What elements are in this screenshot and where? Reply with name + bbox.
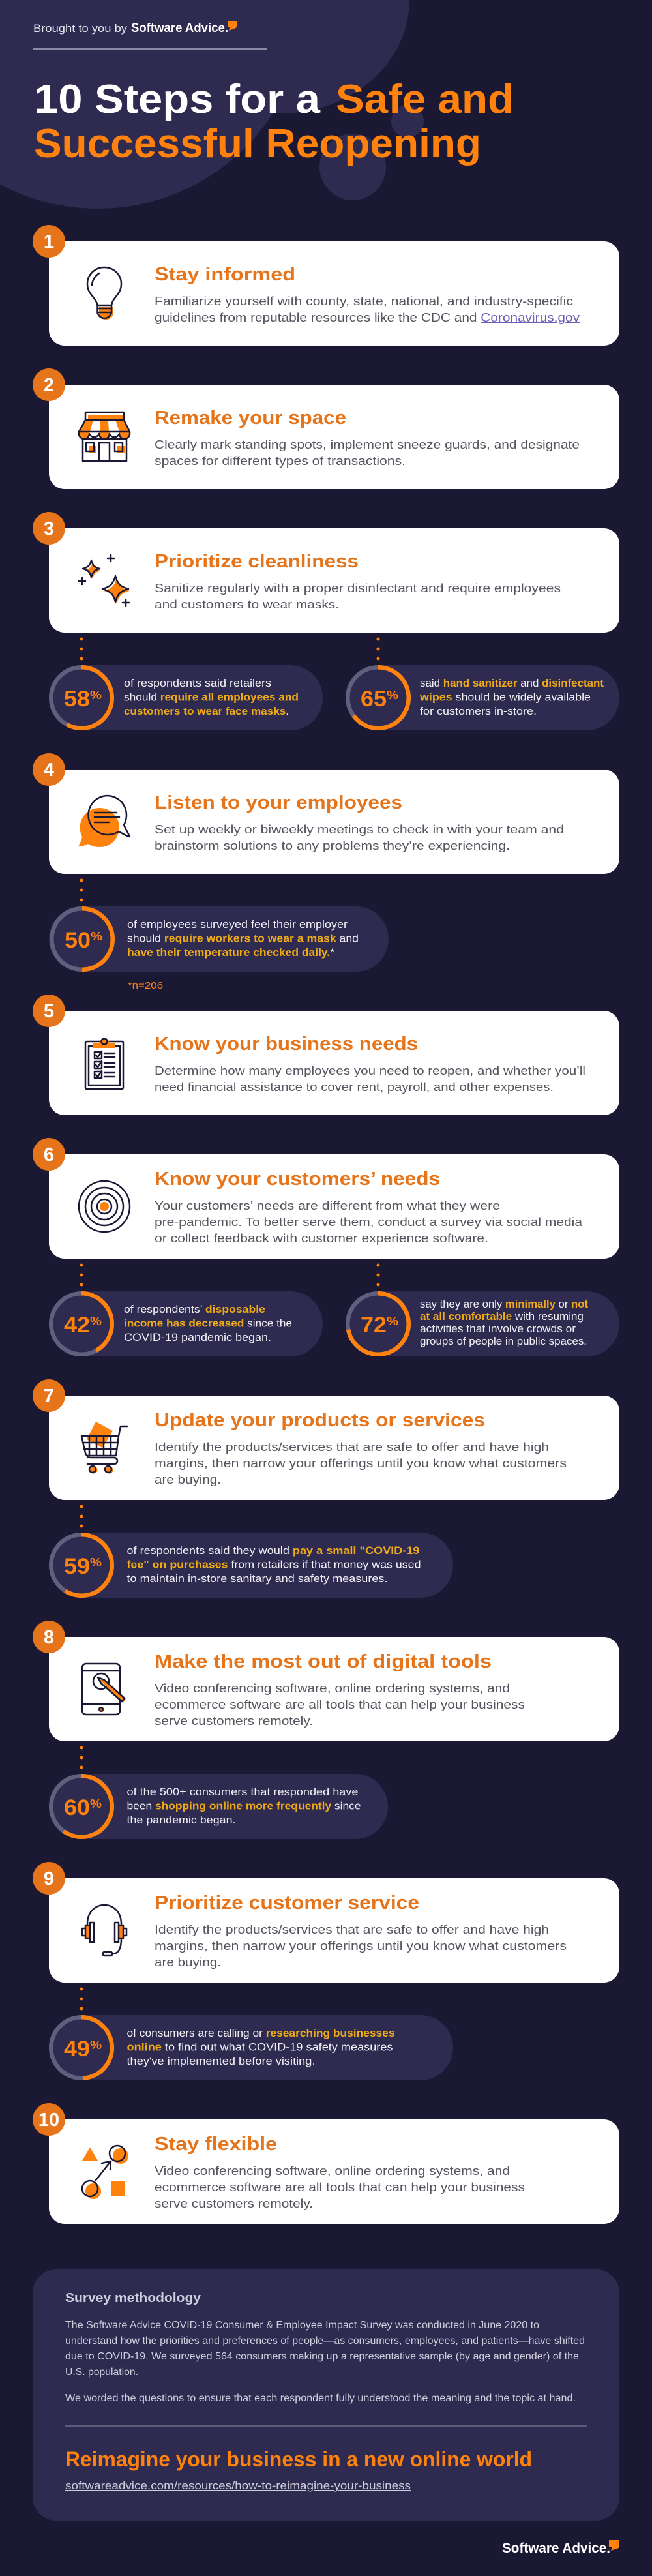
step 9 text bbox=[155, 1923, 567, 1969]
stat text: should require workers to wear a mask and bbox=[127, 933, 359, 944]
step 3 text: Sanitize regularly with a proper disinfectant and require employees bbox=[155, 582, 561, 595]
step 6 badge bbox=[33, 1138, 65, 1171]
stat value: % bbox=[91, 930, 102, 943]
stat value bbox=[64, 1795, 102, 1820]
step 2 text: spaces for different types of transactions. bbox=[155, 455, 406, 468]
brought to you by line bbox=[33, 21, 267, 50]
icon: tablet and stylus bbox=[82, 1664, 126, 1715]
stat text: at all comfortable with resuming bbox=[420, 1310, 584, 1323]
step 3 heading: Prioritize cleanliness bbox=[155, 551, 359, 572]
icon: light bulb bbox=[87, 267, 121, 320]
step 1 badge bbox=[33, 225, 65, 258]
step 2 badge: 2 bbox=[44, 375, 54, 396]
header background blobs bbox=[0, 0, 424, 209]
step 10 text: ecommerce software are all tools that can help your business bbox=[155, 2181, 525, 2194]
step 8 panel bbox=[33, 1621, 619, 1741]
step 1 text bbox=[155, 295, 580, 324]
step 5 heading: Know your business needs bbox=[155, 1034, 418, 1055]
step 10 badge: 10 bbox=[38, 2110, 59, 2131]
connector dots bbox=[80, 1264, 83, 1286]
stat text bbox=[420, 1298, 588, 1347]
step 6 panel bbox=[33, 1138, 619, 1259]
stat value bbox=[361, 1313, 398, 1338]
stat text: activities that involve crowds or bbox=[420, 1323, 576, 1335]
stat value: 59 bbox=[64, 1554, 90, 1579]
stat text: should require all employees and bbox=[124, 691, 299, 703]
stat value: 49 bbox=[64, 2037, 90, 2061]
stat value: 65 bbox=[361, 687, 387, 711]
stat value: 72 bbox=[361, 1313, 387, 1338]
stat value: 42 bbox=[64, 1313, 90, 1338]
stat text: for customers in-store. bbox=[420, 705, 537, 717]
stat value bbox=[64, 1313, 102, 1338]
step 8 text: serve customers remotely. bbox=[155, 1715, 313, 1728]
stat text: COVID-19 pandemic began. bbox=[124, 1331, 271, 1343]
step 6 heading: Know your customers’ needs bbox=[155, 1169, 440, 1190]
stat pill: 65% bbox=[346, 665, 619, 730]
panel: survey methodology bbox=[33, 2269, 619, 2521]
step 3 text: and customers to wear masks. bbox=[155, 598, 339, 611]
step 3 badge: 3 bbox=[44, 518, 54, 539]
step 8 text bbox=[155, 1682, 525, 1728]
step 4 badge bbox=[33, 753, 65, 786]
step 5 text: Determine how many employees you need to reopen, and whether you’ll bbox=[155, 1064, 585, 1077]
stat text bbox=[124, 677, 299, 717]
stat text: the pandemic began. bbox=[126, 1814, 236, 1826]
donut: 58% bbox=[51, 667, 112, 728]
stat value bbox=[64, 687, 102, 711]
stat value: % bbox=[387, 689, 398, 702]
step 8 badge: 8 bbox=[44, 1627, 54, 1648]
title: 10 Steps for a bbox=[34, 77, 321, 122]
donut: 49% bbox=[51, 2017, 112, 2078]
step 8 text: Video conferencing software, online ordering systems, and bbox=[155, 1682, 510, 1695]
stat text: of respondents said retailers bbox=[124, 677, 271, 689]
step 4 text: brainstorm solutions to any problems they’re experiencing. bbox=[155, 839, 510, 852]
methodology text: due to COVID-19. We surveyed 564 consumers making up a representative sample (by age and gender) of the bbox=[65, 2351, 579, 2362]
stat pill: 49% bbox=[49, 2015, 453, 2080]
step 3 text bbox=[155, 582, 561, 611]
step 4 panel bbox=[33, 753, 619, 874]
step 7 text: Identify the products/services that are safe to offer and have high bbox=[155, 1441, 549, 1454]
stat text: said hand sanitizer and disinfectant bbox=[420, 677, 604, 689]
step 7 text: are buying. bbox=[155, 1473, 221, 1486]
footer logo: Software Advice. bbox=[502, 2541, 610, 2556]
connector dots bbox=[80, 638, 83, 660]
stat text: say they are only minimally or not bbox=[420, 1298, 588, 1310]
stat text bbox=[126, 2027, 395, 2067]
title bbox=[34, 77, 514, 166]
stat text bbox=[126, 1544, 421, 1585]
step 10 text: serve customers remotely. bbox=[155, 2197, 313, 2210]
donut: 60% bbox=[51, 1776, 112, 1837]
connector dots bbox=[80, 879, 83, 901]
step 5 badge bbox=[33, 995, 65, 1027]
stat pill: 58% bbox=[49, 665, 323, 730]
step 9 text: margins, then narrow your offerings until you know what customers bbox=[155, 1939, 567, 1953]
stat text: of the 500+ consumers that responded have bbox=[126, 1786, 359, 1798]
brought to you by line: Brought to you by bbox=[33, 22, 128, 35]
step 7 heading: Update your products or services bbox=[155, 1410, 485, 1431]
stat text: of employees surveyed feel their employer bbox=[127, 918, 348, 931]
stat text: of consumers are calling or researching businesses bbox=[126, 2027, 395, 2039]
methodology text: U.S. population. bbox=[65, 2367, 138, 2378]
icon: storefront bbox=[79, 412, 130, 461]
connector dots bbox=[80, 1746, 83, 1769]
step 1 text: Familiarize yourself with county, state, national, and industry-specific bbox=[155, 295, 573, 308]
stat text: customers to wear face masks. bbox=[124, 705, 289, 717]
step 7 panel bbox=[33, 1379, 619, 1500]
step 5 panel bbox=[33, 995, 619, 1115]
stat value bbox=[64, 2037, 102, 2061]
stat value: % bbox=[90, 1797, 102, 1810]
stat text bbox=[124, 1303, 292, 1343]
step 7 badge bbox=[33, 1379, 65, 1412]
icon: sparkles bbox=[79, 555, 130, 606]
step 1 panel bbox=[33, 225, 619, 346]
methodology text: We worded the questions to ensure that each respondent fully understood the meaning and the topic at hand. bbox=[65, 2393, 576, 2404]
call to action link: softwareadvice.com/resources/how-to-reimagine-your-business bbox=[65, 2479, 411, 2492]
methodology text: The Software Advice COVID-19 Consumer & Employee Impact Survey was conducted in June 2020 to bbox=[65, 2320, 539, 2331]
icon: shopping cart bbox=[82, 1422, 127, 1474]
step 2 heading: Remake your space bbox=[155, 408, 346, 428]
stat value: % bbox=[90, 689, 102, 702]
step 8 badge bbox=[33, 1621, 65, 1653]
methodology text bbox=[65, 2320, 585, 2404]
stat text bbox=[419, 677, 604, 717]
stat pill: 72% bbox=[346, 1291, 619, 1356]
icon: headset bbox=[82, 1905, 126, 1956]
donut: 65% bbox=[348, 667, 409, 728]
step 7 text: margins, then narrow your offerings until you know what customers bbox=[155, 1457, 567, 1470]
step 10 panel bbox=[33, 2103, 619, 2224]
step 4 text: Set up weekly or biweekly meetings to check in with your team and bbox=[155, 823, 564, 836]
stat pill: 60% bbox=[49, 1774, 388, 1839]
methodology heading: Survey methodology bbox=[65, 2291, 201, 2305]
step 2 text: Clearly mark standing spots, implement sneeze guards, and designate bbox=[155, 438, 580, 451]
step 5 text bbox=[155, 1064, 585, 1094]
icon: speech bubbles bbox=[78, 796, 130, 847]
stat text: of respondents said they would pay a small "COVID-19 bbox=[126, 1544, 420, 1557]
connector dots bbox=[377, 638, 379, 660]
step 4 badge: 4 bbox=[44, 760, 54, 781]
donut: 59% bbox=[51, 1535, 112, 1596]
step 2 panel bbox=[33, 368, 619, 489]
connector dots bbox=[80, 1988, 83, 2010]
stat value: 60 bbox=[64, 1795, 90, 1820]
icon: target bbox=[79, 1181, 130, 1232]
step 3 badge bbox=[33, 512, 65, 545]
step 10 heading: Stay flexible bbox=[155, 2134, 277, 2155]
step 9 text: are buying. bbox=[155, 1956, 221, 1969]
step 5 text: need financial assistance to cover rent, payroll, and other expenses. bbox=[155, 1081, 554, 1094]
connector dots bbox=[377, 1264, 379, 1286]
step 9 badge: 9 bbox=[44, 1868, 54, 1889]
stat value bbox=[361, 687, 398, 711]
icon: clipboard checklist bbox=[85, 1038, 123, 1089]
step 6 text: pre-pandemic. To better serve them, conduct a survey via social media bbox=[155, 1216, 583, 1229]
step 6 badge: 6 bbox=[44, 1145, 54, 1165]
step 7 text bbox=[155, 1441, 567, 1486]
stat text bbox=[126, 1786, 361, 1826]
footnote: *n=206 bbox=[128, 980, 163, 991]
stat value bbox=[64, 1554, 102, 1579]
stat value: % bbox=[90, 1315, 102, 1328]
step 7 badge: 7 bbox=[44, 1386, 54, 1407]
stat text: online to find out what COVID-19 safety measures bbox=[126, 2041, 393, 2053]
methodology text: understand how the priorities and preferences of people—as consumers, employees, and patients—have shifted bbox=[65, 2335, 585, 2346]
stat text: they've implemented before visiting. bbox=[126, 2055, 316, 2067]
stat text: to maintain in-store sanitary and safety measures. bbox=[126, 1572, 387, 1585]
stat text: groups of people in public spaces. bbox=[420, 1335, 587, 1347]
step 6 text: or collect feedback with customer experience software. bbox=[155, 1232, 488, 1245]
stat text: of respondents’ disposable bbox=[124, 1303, 265, 1315]
step 1 heading: Stay informed bbox=[155, 264, 295, 285]
step 3 panel bbox=[33, 512, 619, 633]
step 9 badge bbox=[33, 1862, 65, 1895]
step 5 badge: 5 bbox=[44, 1001, 54, 1022]
stat pill: 42% bbox=[49, 1291, 323, 1356]
call to action heading: Reimagine your business in a new online world bbox=[65, 2448, 532, 2471]
step 9 text: Identify the products/services that are safe to offer and have high bbox=[155, 1923, 549, 1936]
stat value bbox=[65, 928, 102, 953]
donut: 72% bbox=[348, 1293, 409, 1355]
stat text: income has decreased since the bbox=[124, 1317, 292, 1329]
step 2 badge bbox=[33, 368, 65, 401]
step 1 text: guidelines from reputable resources like the CDC and Coronavirus.gov bbox=[155, 311, 580, 324]
stat text bbox=[127, 918, 359, 959]
stat value: 58 bbox=[64, 687, 90, 711]
stat pill: 50% bbox=[49, 906, 389, 972]
step 8 heading: Make the most out of digital tools bbox=[155, 1651, 492, 1672]
brought to you by line: Software Advice. bbox=[131, 22, 228, 35]
step 6 text: Your customers’ needs are different from what they were bbox=[155, 1199, 500, 1212]
step 8 text: ecommerce software are all tools that can help your business bbox=[155, 1698, 525, 1711]
step 4 heading: Listen to your employees bbox=[155, 792, 402, 813]
icon: shapes and arrow bbox=[82, 2146, 128, 2199]
step 9 heading: Prioritize customer service bbox=[155, 1893, 419, 1913]
stat text: been shopping online more frequently since bbox=[126, 1800, 361, 1812]
stat value: % bbox=[90, 1556, 102, 1569]
step 10 text: Video conferencing software, online ordering systems, and bbox=[155, 2164, 510, 2178]
title: Successful Reopening bbox=[34, 121, 481, 166]
stat value: 50 bbox=[65, 928, 91, 953]
step 10 badge bbox=[33, 2103, 65, 2136]
step 6 text bbox=[155, 1199, 583, 1245]
stat text: wipes should be widely available bbox=[419, 691, 591, 703]
stat value: % bbox=[387, 1315, 398, 1328]
step 2 text bbox=[155, 438, 580, 468]
step 4 text bbox=[155, 823, 564, 852]
title: Safe and bbox=[336, 77, 514, 122]
donut: 50% bbox=[52, 908, 113, 970]
stat text: have their temperature checked daily. * bbox=[127, 946, 334, 959]
stat pill: 59% bbox=[49, 1533, 453, 1598]
step 10 text bbox=[155, 2164, 525, 2210]
connector dots bbox=[80, 1505, 83, 1527]
donut: 42% bbox=[51, 1293, 112, 1355]
step 9 panel bbox=[33, 1862, 619, 1983]
step 1 badge: 1 bbox=[44, 232, 54, 252]
stat text: fee" on purchases from retailers if that money was used bbox=[126, 1559, 421, 1570]
stat value: % bbox=[90, 2039, 102, 2052]
